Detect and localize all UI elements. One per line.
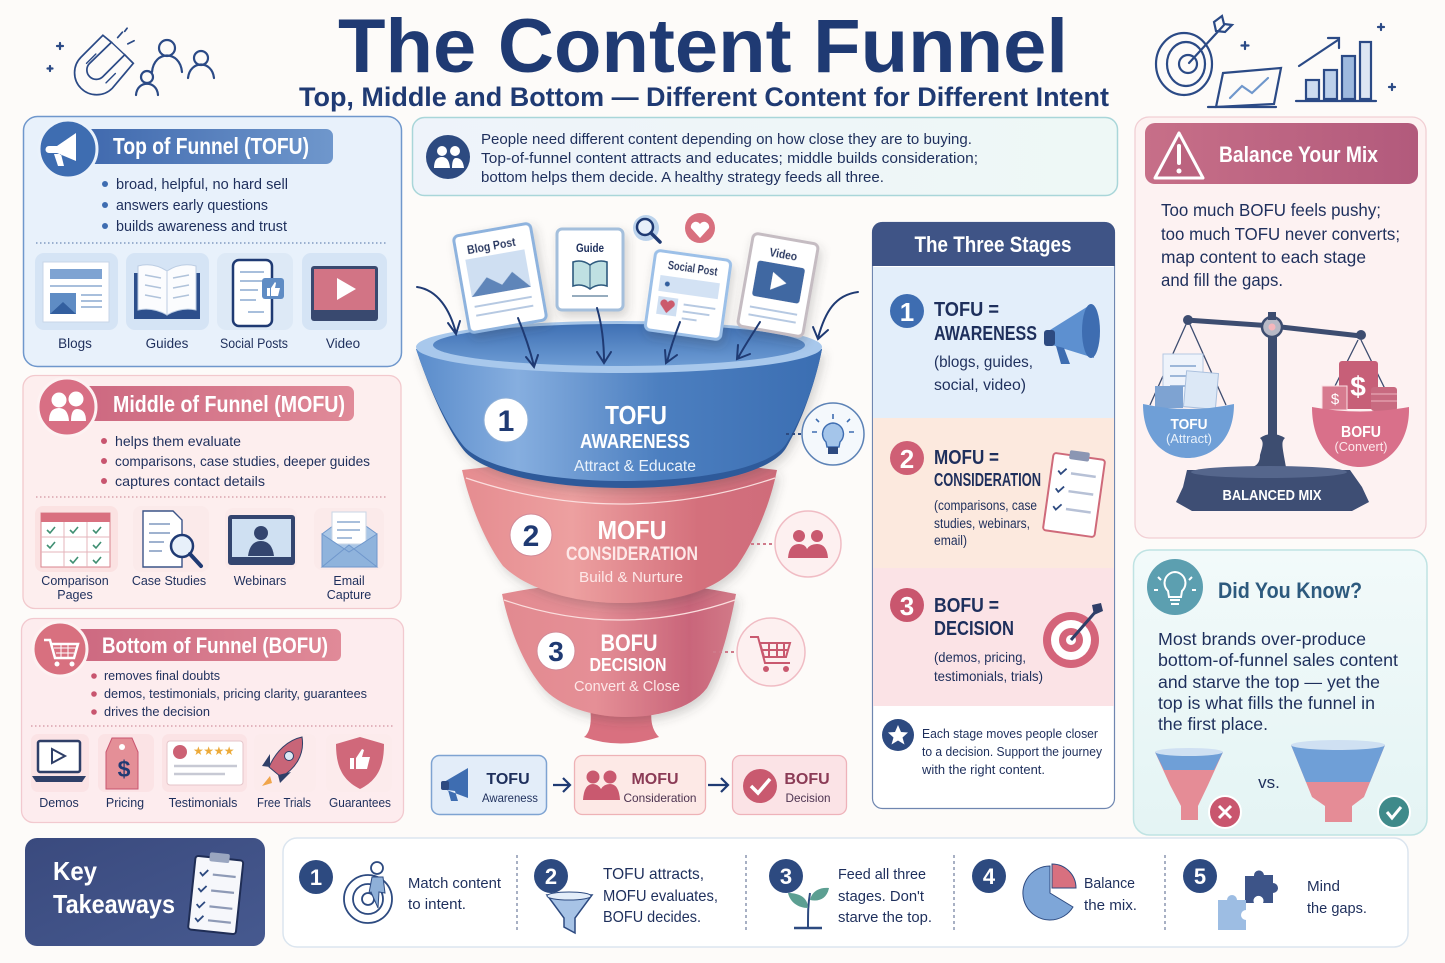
BOFU bullet list	[91, 668, 367, 719]
icon: people callout	[751, 511, 841, 577]
tile: email capture: Capture	[327, 588, 371, 602]
did you know text: the first place.	[1158, 714, 1268, 734]
heading: TOFU	[39, 120, 333, 178]
stage card: BOFU: testimonials, trials)	[934, 668, 1043, 684]
tile: free trials: Free Trials	[257, 796, 311, 810]
funnel illustration	[416, 321, 822, 744]
illustration: balance scale	[1143, 312, 1409, 511]
did you know text	[1158, 629, 1398, 734]
card: social post: Social Post	[667, 258, 718, 279]
TOFU bullet list: broad, helpful, no hard sell	[116, 177, 288, 193]
funnel stage 1: TOFU: AWARENESS	[580, 431, 690, 453]
stage card: MOFU: (comparisons, case	[934, 498, 1037, 513]
panel: bottom of funnel	[22, 618, 404, 822]
funnel spout	[584, 708, 659, 744]
takeaway 5: 5	[1194, 864, 1206, 889]
TOFU bullet list	[102, 177, 288, 235]
takeaway 2: MOFU evaluates,	[603, 888, 718, 905]
tile: demos: Demos	[39, 796, 79, 810]
stage note: to a decision. Support the journey	[922, 745, 1103, 759]
balance text: map content to each stage	[1161, 247, 1366, 267]
tile: pricing: $	[118, 756, 131, 782]
card: blog post	[453, 223, 547, 333]
tile: social posts: Social Posts	[220, 336, 288, 351]
icon: search bubble	[633, 215, 660, 242]
tile: video	[302, 253, 387, 351]
stage card: TOFU: (blogs, guides,	[934, 354, 1033, 371]
chip: TOFU awareness: TOFU	[486, 771, 530, 788]
tile: webinars: Webinars	[234, 574, 286, 588]
panel: the three stages	[872, 222, 1115, 808]
panel: did you know	[1134, 550, 1427, 835]
tile: email capture	[314, 508, 384, 602]
balance text: too much TOFU never converts;	[1161, 224, 1400, 244]
heading: TOFU: Top of Funnel (TOFU)	[113, 133, 309, 159]
did you know text: bottom-of-funnel sales content	[1158, 650, 1398, 670]
takeaway 4: 4	[983, 864, 996, 889]
arrows into funnel	[417, 287, 858, 367]
title: The Content Funnel	[338, 4, 1068, 89]
chip: BOFU decision	[732, 756, 846, 814]
scale right pan: BOFU	[1341, 424, 1381, 441]
header: balance your mix: Balance Your Mix	[1219, 142, 1379, 167]
TOFU bullet list: answers early questions	[116, 198, 268, 214]
BOFU bullet list: demos, testimonials, pricing clarity, guarantees	[104, 686, 367, 701]
card: guide	[557, 229, 623, 310]
panel: middle of funnel	[23, 376, 401, 608]
heading: BOFU: Bottom of Funnel (BOFU)	[102, 633, 328, 658]
stage card: TOFU: social, video)	[934, 377, 1026, 394]
chip: BOFU decision: Decision	[786, 791, 830, 805]
takeaway 2: TOFU attracts,	[603, 866, 704, 883]
flow chips	[432, 756, 846, 814]
tile: testimonials: ★★★★	[193, 744, 234, 758]
icon: cart callout	[713, 618, 805, 686]
takeaway 1	[299, 860, 501, 923]
funnel stage 3: BOFU: DECISION	[590, 655, 666, 675]
scale right pan: (Convert)	[1334, 440, 1388, 454]
icon: magnet and audience	[48, 28, 214, 95]
takeaway 5: Mind	[1307, 879, 1340, 895]
panel: intro statement	[412, 118, 1118, 196]
icon: checklist	[1043, 448, 1106, 537]
tile: pricing: Pricing	[106, 796, 144, 810]
intro text: People need different content depending on how close they are to buying.	[481, 131, 972, 148]
funnel stage 2: MOFU: CONSIDERATION	[566, 544, 698, 565]
stage card: BOFU	[873, 568, 1114, 706]
stage card: BOFU: 3	[900, 591, 914, 621]
tile: webinars	[225, 508, 297, 588]
stage card: TOFU: 1	[900, 297, 914, 327]
chip: BOFU decision: BOFU	[784, 771, 830, 788]
tile: email capture: Email	[333, 574, 365, 588]
heading: BOFU	[33, 622, 341, 676]
stage card: BOFU: DECISION	[934, 618, 1014, 640]
tile: comparison pages: Pages	[57, 588, 93, 602]
funnel stage 1: TOFU: TOFU	[605, 400, 667, 430]
chip: MOFU consideration	[574, 756, 706, 814]
card: guide: Guide	[576, 241, 604, 255]
header: three stages: The Three Stages	[914, 232, 1072, 257]
takeaway 3: Feed all three	[838, 866, 926, 883]
did you know text: Most brands over-produce	[1158, 629, 1366, 649]
MOFU bullet list: captures contact details	[115, 473, 265, 489]
icon: people	[426, 135, 470, 179]
tile: case studies: Case Studies	[132, 574, 206, 588]
chip: MOFU consideration: MOFU	[631, 771, 679, 788]
icon: target and dart	[1043, 603, 1103, 668]
stage note	[882, 719, 1103, 777]
tile: guarantees	[326, 734, 392, 810]
takeaway 3	[769, 859, 932, 928]
takeaway 1: to intent.	[408, 897, 466, 913]
MOFU bullet list: comparisons, case studies, deeper guides	[115, 453, 370, 469]
funnel stage 2: MOFU: MOFU	[598, 515, 666, 545]
tile: guides: Guides	[146, 336, 189, 351]
heading: MOFU	[38, 378, 354, 436]
chip: MOFU consideration: Consideration	[624, 791, 696, 805]
panel: top of funnel	[24, 116, 402, 366]
BOFU bullet list: drives the decision	[104, 704, 210, 719]
takeaway 3: starve the top.	[838, 909, 932, 926]
stage note: with the right content.	[921, 763, 1045, 777]
header: balance your mix	[1145, 123, 1418, 184]
heading: MOFU: Middle of Funnel (MOFU)	[113, 391, 345, 417]
funnel stage 2: MOFU: 2	[523, 520, 539, 553]
tile: guarantees: Guarantees	[329, 796, 391, 810]
tile: comparison pages: Comparison	[41, 574, 109, 588]
tile: blogs	[35, 253, 118, 351]
takeaway 4	[972, 859, 1137, 920]
icon: bottom-heavy funnel with cross	[1155, 748, 1241, 828]
chip: TOFU awareness: Awareness	[482, 791, 538, 805]
card: social post	[645, 250, 731, 340]
takeaway 3: 3	[780, 864, 792, 889]
tile: video: Video	[326, 336, 360, 351]
takeaway 1: 1	[310, 865, 322, 890]
arrow	[553, 778, 570, 792]
funnel stage 3: BOFU: BOFU	[600, 630, 658, 657]
takeaway 4: the mix.	[1084, 898, 1137, 914]
icon: target, laptop and growth chart	[1156, 16, 1395, 107]
tile: case studies	[132, 506, 209, 588]
scale stand: BALANCED MIX	[1222, 488, 1322, 504]
stage note: Each stage moves people closer	[922, 727, 1098, 741]
tile: comparison pages	[35, 506, 118, 602]
scale right pan: $	[1350, 371, 1366, 402]
did you know text: and starve the top — yet the	[1158, 672, 1380, 692]
balance text	[1161, 200, 1400, 290]
icon: megaphone	[1044, 304, 1100, 364]
funnel stage 2: MOFU	[462, 460, 777, 603]
stage card: MOFU: MOFU =	[934, 447, 999, 469]
takeaway 2: 2	[545, 864, 557, 889]
chip: TOFU awareness	[432, 756, 546, 814]
tile: pricing	[98, 734, 154, 810]
stage card: MOFU: studies, webinars,	[934, 516, 1030, 531]
stage card: TOFU: AWARENESS	[934, 323, 1037, 345]
takeaway 3: stages. Don't	[838, 888, 925, 905]
scale stand	[1176, 312, 1369, 511]
funnel stage 2: MOFU: Build & Nurture	[579, 569, 683, 586]
heading: did you know: Did You Know?	[1218, 578, 1362, 603]
takeaway 2: BOFU decides.	[603, 909, 701, 926]
takeaway 1: Match content	[408, 876, 501, 892]
icon: top-heavy funnel with check	[1291, 740, 1410, 828]
tile: testimonials: Testimonials	[169, 796, 237, 810]
TOFU bullet list: builds awareness and trust	[116, 219, 287, 235]
card: video: Video	[768, 245, 798, 264]
icon: clipboard	[188, 851, 244, 934]
stage card: MOFU	[873, 418, 1114, 568]
header: three stages	[872, 222, 1115, 266]
funnel stage 1: TOFU	[416, 321, 822, 488]
intro text	[481, 131, 978, 186]
icon: teal lightbulb	[1147, 559, 1203, 615]
tile: free trials	[254, 734, 316, 810]
panel: takeaways list	[283, 838, 1408, 947]
takeaway 2	[534, 859, 718, 933]
stage card: BOFU: BOFU =	[934, 595, 999, 617]
intro text: Top-of-funnel content attracts and educates; middle builds consideration;	[481, 150, 978, 167]
scale right pan: $	[1331, 391, 1340, 408]
tile: guides	[126, 253, 209, 351]
intro text: bottom helps them decide. A healthy strategy feeds all three.	[481, 169, 884, 186]
funnel stage 1: TOFU: 1	[498, 405, 514, 438]
takeaway 4: Balance	[1084, 876, 1135, 892]
funnel stage 3: BOFU	[502, 582, 736, 717]
MOFU bullet list: helps them evaluate	[115, 433, 241, 449]
tile: blogs: Blogs	[58, 336, 92, 351]
stage card: TOFU	[873, 267, 1114, 418]
BOFU bullet list: removes final doubts	[104, 668, 220, 683]
scale left pan: (Attract)	[1166, 432, 1212, 446]
tile: social posts	[217, 253, 293, 351]
label: vs: vs.	[1258, 773, 1280, 792]
stage card: BOFU: (demos, pricing,	[934, 649, 1026, 665]
scale left pan	[1143, 320, 1388, 458]
stage card: TOFU: TOFU =	[934, 299, 999, 321]
MOFU bullet list	[101, 433, 370, 489]
funnel stage 3: BOFU: Convert & Close	[574, 678, 680, 695]
stage card: MOFU: email)	[934, 533, 967, 548]
takeaway 5	[1183, 859, 1367, 930]
stage card: MOFU: 2	[900, 444, 914, 474]
subtitle: Top, Middle and Bottom — Different Content for Different Intent	[299, 82, 1109, 112]
panel: balance your mix	[1135, 117, 1426, 538]
balance text: Too much BOFU feels pushy;	[1161, 200, 1381, 220]
balance text: and fill the gaps.	[1161, 270, 1283, 290]
tile: testimonials	[162, 734, 247, 810]
did you know text: top is what fills the funnel in	[1158, 693, 1375, 713]
panel: key takeaways label	[25, 838, 265, 946]
funnel stage 1: TOFU: Attract & Educate	[574, 458, 696, 475]
icon: heart bubble	[685, 213, 715, 243]
panel: key takeaways label: Key	[53, 856, 97, 886]
scale left pan: TOFU	[1170, 416, 1208, 433]
arrow	[708, 778, 728, 792]
funnel stage 3: BOFU: 3	[548, 636, 564, 667]
stage card: MOFU: CONSIDERATION	[934, 470, 1041, 490]
panel: key takeaways label: Takeaways	[53, 889, 175, 919]
icon: lightbulb callout	[786, 403, 864, 465]
tile: demos	[31, 734, 89, 810]
scale right pan	[1312, 361, 1409, 467]
takeaway 5: the gaps.	[1307, 901, 1367, 917]
card: video	[737, 233, 819, 337]
card: blog post: Blog Post	[466, 235, 517, 257]
